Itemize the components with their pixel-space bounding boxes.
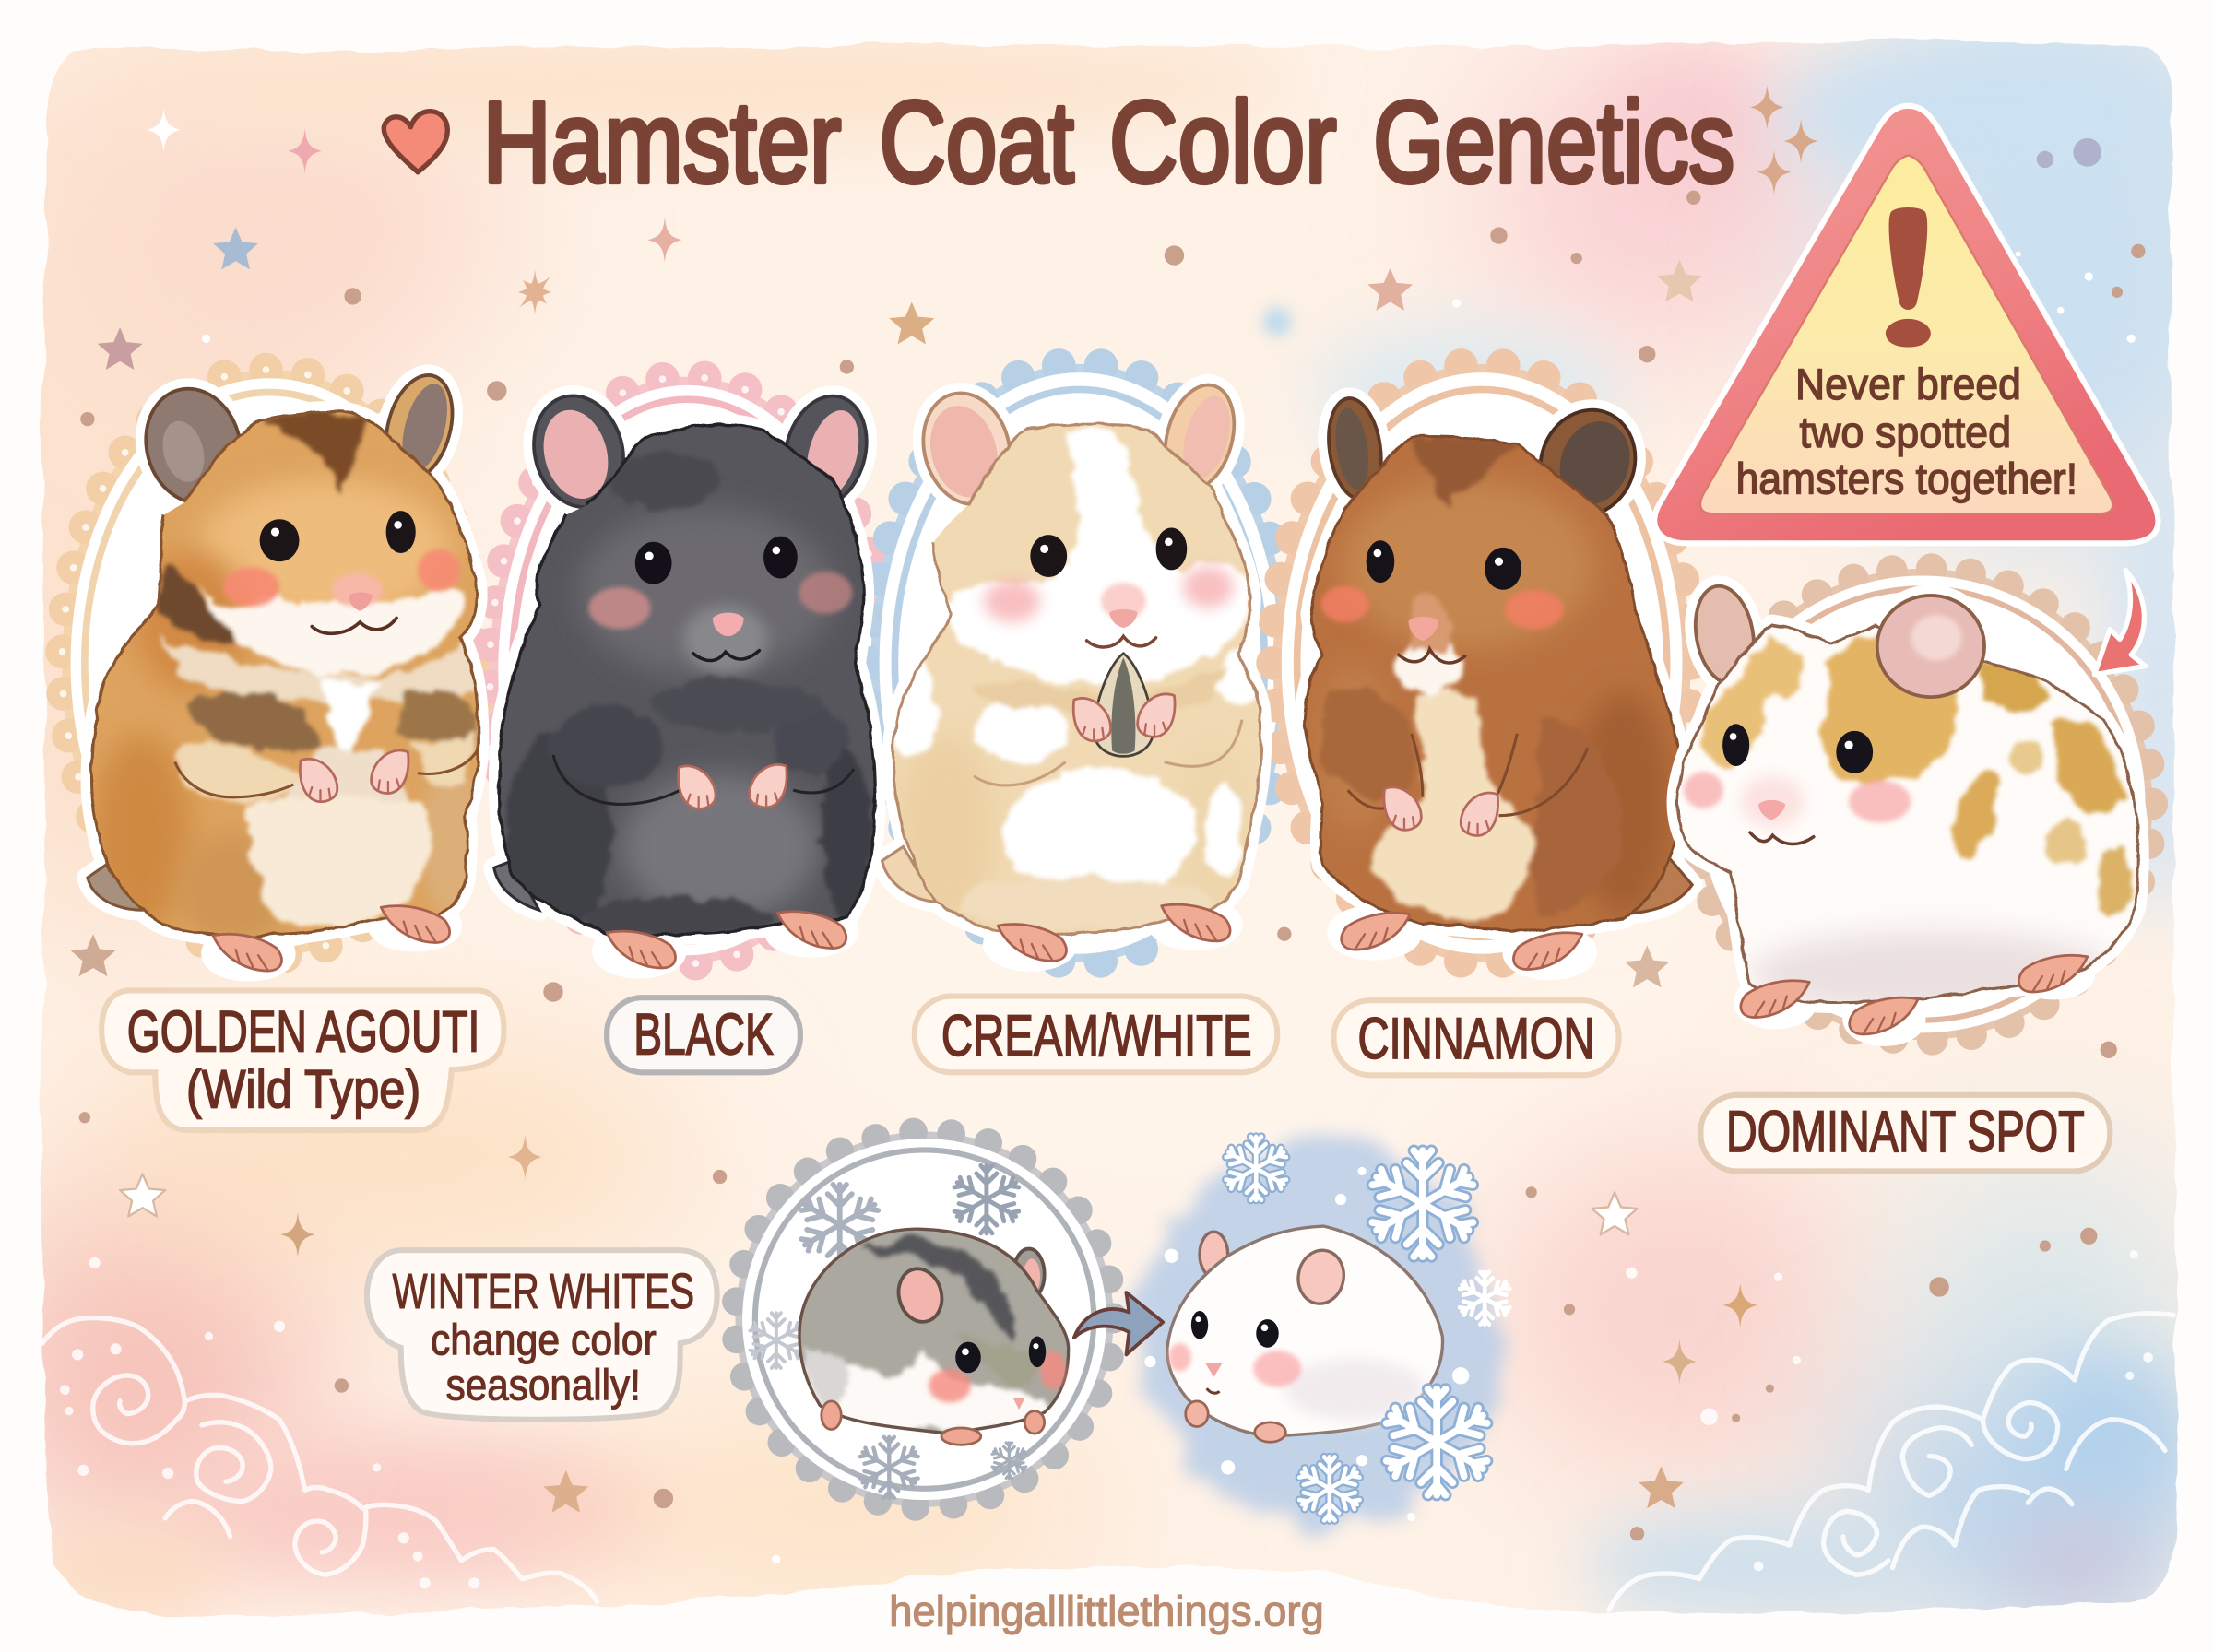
title heart icon — [384, 112, 447, 172]
callout: winter whites: seasonally! — [446, 1361, 641, 1410]
title: Coat — [880, 77, 1074, 206]
bottom right cloud decoration — [1609, 1250, 2173, 1610]
label: black: BLACK — [633, 1002, 774, 1067]
snowflakes: snowy scene — [1144, 1137, 1511, 1521]
scalloped frame: golden agouti — [62, 370, 477, 957]
label: golden agouti: GOLDEN AGOUTI — [127, 999, 479, 1064]
warning triangle callout — [1654, 106, 2158, 543]
title — [482, 77, 1734, 206]
hamster: winter white snowy coat — [1167, 1226, 1443, 1442]
callout: winter whites — [367, 1250, 717, 1420]
label: cinnamon — [1333, 1000, 1619, 1075]
icon: exclamation mark — [1886, 207, 1931, 348]
label: cream white: CREAM/WHITE — [941, 1004, 1252, 1068]
callout: winter whites: change color — [431, 1316, 657, 1364]
scalloped frame: cinnamon — [1273, 364, 1691, 962]
label: golden agouti — [101, 990, 503, 1130]
icon: sunflower seed — [1094, 654, 1154, 756]
scalloped frame: dominant spot — [1692, 569, 2152, 1040]
title: Genetics — [1373, 77, 1734, 206]
hamster: dominant spot — [1665, 582, 2152, 1035]
title: Hamster — [482, 77, 841, 206]
label: cream white — [915, 997, 1277, 1072]
hamster: winter white grey coat — [783, 1213, 1080, 1454]
warning text: Never breed — [1795, 360, 2021, 409]
scalloped frame: black — [490, 377, 885, 963]
hamster: golden agouti — [71, 368, 494, 971]
arrow: warning to spotted hamster — [2094, 570, 2146, 675]
winter scene: snowy background — [1139, 1140, 1500, 1528]
bottom left cloud decoration — [42, 1257, 597, 1601]
label: black — [607, 997, 800, 1072]
hamster: cinnamon — [1271, 395, 1708, 970]
label: cinnamon: CINNAMON — [1357, 1007, 1595, 1071]
warning text: two spotted — [1800, 408, 2011, 457]
hamster: cream white with seed — [875, 377, 1271, 961]
title: Color — [1109, 77, 1336, 206]
website credit: helpingalllittlethings.org — [889, 1587, 1324, 1634]
label: dominant spot: DOMINANT SPOT — [1726, 1100, 2085, 1164]
arrow: seasonal change — [1074, 1292, 1163, 1354]
hamster: black — [479, 385, 904, 968]
callout: winter whites: WINTER WHITES — [393, 1265, 694, 1319]
scalloped frame: cream — [870, 364, 1288, 962]
warning text — [1736, 360, 2077, 504]
scalloped frame: winter coat circle — [735, 1132, 1114, 1507]
warning text: hamsters together! — [1736, 455, 2077, 504]
label: golden agouti: (Wild Type) — [186, 1060, 420, 1120]
label: dominant spot — [1700, 1095, 2110, 1171]
